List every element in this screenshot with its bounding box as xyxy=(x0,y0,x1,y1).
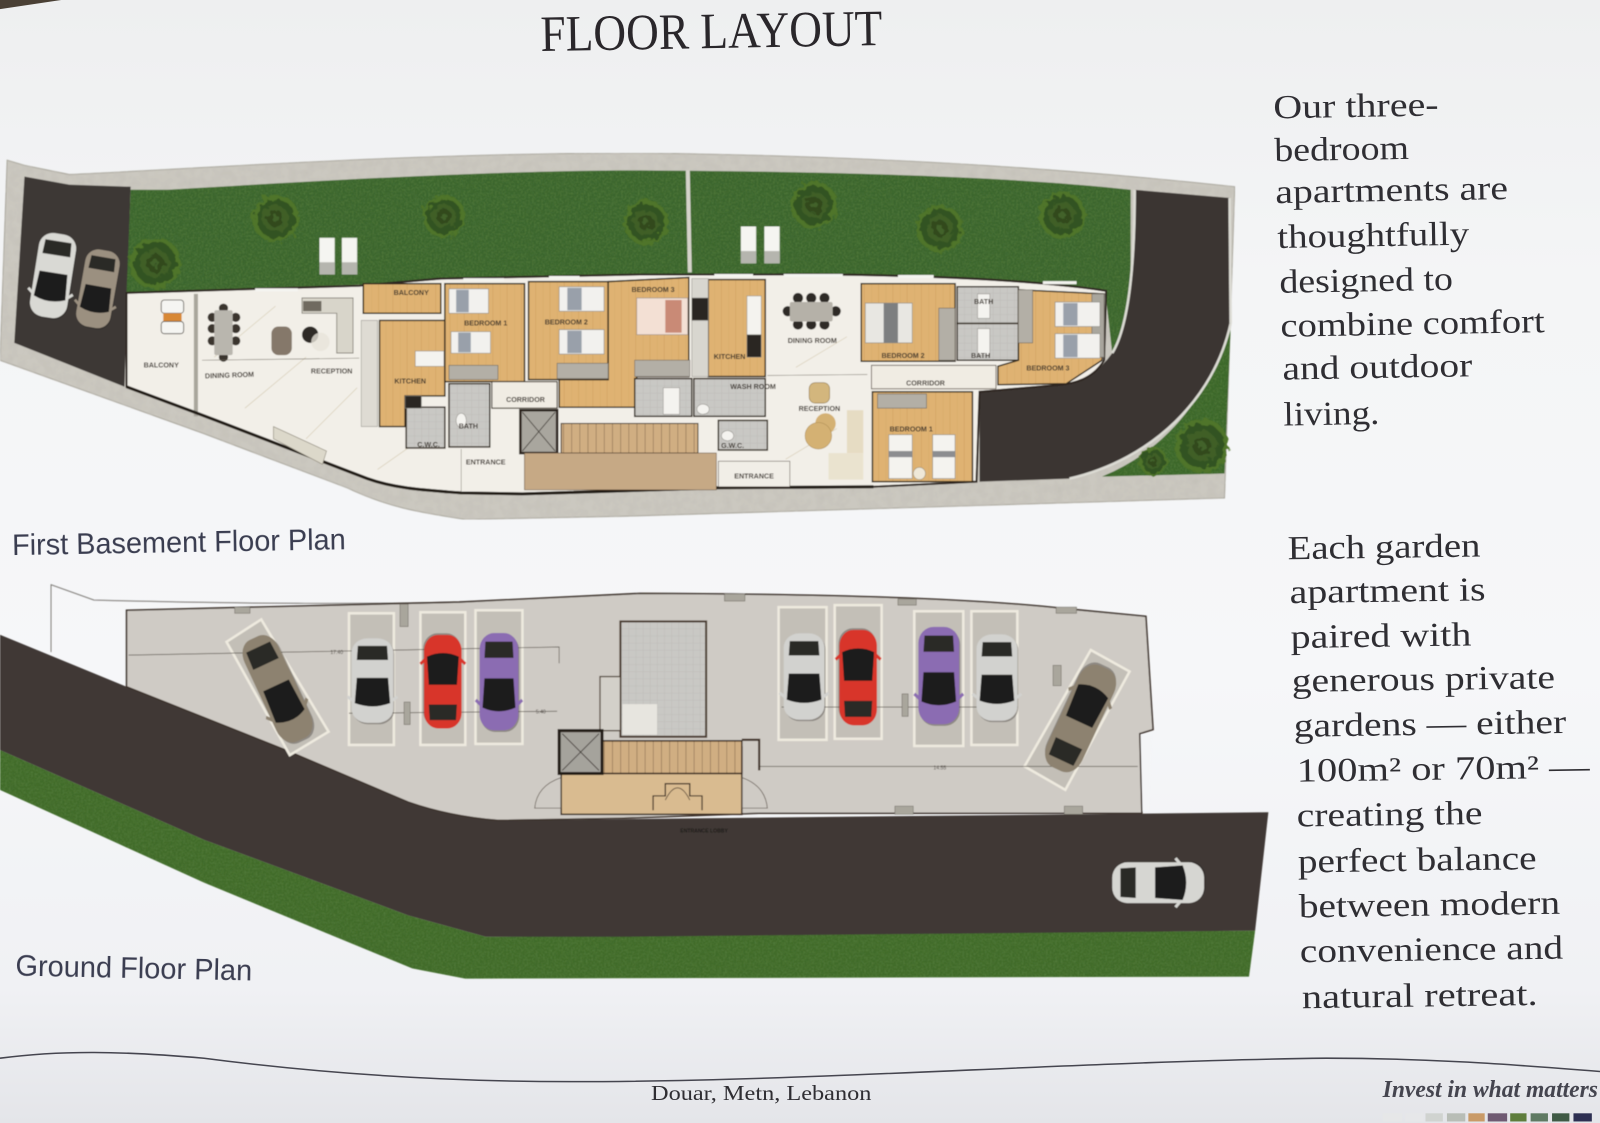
dimension values: 1.80 xyxy=(934,706,944,712)
room labels: BALCONY xyxy=(144,361,179,369)
right dining table xyxy=(783,293,841,330)
dimension values: 14.55 xyxy=(933,765,946,771)
dimension values: 17.40 xyxy=(330,650,343,656)
access road xyxy=(0,635,1268,937)
text block: three-bedroom apartments xyxy=(1273,86,1546,434)
first basement floor plan xyxy=(0,153,1235,519)
notch at garage edge xyxy=(1141,735,1152,811)
text block: three-bedroom apartments: apartments are xyxy=(1275,170,1508,211)
storage room xyxy=(600,621,706,737)
dimension values: 5.40 xyxy=(536,709,546,715)
room labels: BEDROOM 2 xyxy=(545,319,588,327)
room labels: ENTRANCE xyxy=(466,458,506,466)
driveway curbs xyxy=(1069,190,1231,479)
text block: garden apartments: apartment is xyxy=(1289,571,1486,611)
text block: three-bedroom apartments: designed to xyxy=(1279,261,1453,301)
text block: garden apartments: perfect balance xyxy=(1298,840,1537,880)
closets xyxy=(449,290,1104,408)
text block: garden apartments: 100m² or 70m² — xyxy=(1297,749,1590,790)
plot boundary xyxy=(51,585,459,652)
beds xyxy=(449,287,1100,480)
room labels xyxy=(144,286,1070,481)
text block: three-bedroom apartments: combine comfort xyxy=(1280,303,1546,345)
room labels: BATH xyxy=(974,298,993,306)
dimension values: 1.80 xyxy=(493,710,503,716)
garden xyxy=(127,170,1131,353)
room labels: BEDROOM 3 xyxy=(1026,364,1070,372)
room labels: G.W.C. xyxy=(721,442,744,450)
room labels: ENTRANCE xyxy=(734,473,774,481)
dimension values xyxy=(330,650,1002,771)
text block: garden apartments: between modern xyxy=(1299,885,1560,925)
garage floor xyxy=(127,593,1153,820)
dimension values: 1.80 xyxy=(366,715,377,721)
room labels: KITCHEN xyxy=(394,378,426,386)
apartment footprint xyxy=(127,274,1106,494)
circulation and lobby xyxy=(492,365,996,490)
balcony partition xyxy=(194,294,198,416)
parking bays xyxy=(227,605,1130,790)
footer location: Douar, Metn, Lebanon xyxy=(651,1081,872,1105)
room labels: BEDROOM 3 xyxy=(631,286,675,294)
footer wave line xyxy=(0,1052,1600,1082)
room labels: BATH xyxy=(459,423,478,431)
text block: garden apartments: paired with xyxy=(1290,616,1472,656)
room labels: DINING ROOM xyxy=(205,371,254,380)
window seat xyxy=(273,427,327,464)
dimension values: 1.80 xyxy=(992,706,1002,712)
dimension lines xyxy=(202,358,867,492)
car on road xyxy=(1112,858,1206,907)
text block: three-bedroom apartments: living. xyxy=(1283,395,1380,434)
dark corner of photo xyxy=(0,0,61,9)
text block: three-bedroom apartments: thoughtfully xyxy=(1277,216,1470,256)
text block: garden apartments: Each garden xyxy=(1287,528,1481,567)
perimeter wall xyxy=(0,153,1235,519)
colour swatches xyxy=(1383,1113,1592,1121)
text block: garden apartments: natural retreat. xyxy=(1302,976,1538,1016)
garden divider xyxy=(688,170,690,272)
marble veining xyxy=(214,306,847,469)
balcony furniture xyxy=(161,300,184,334)
room labels: BEDROOM 1 xyxy=(464,320,507,328)
label: ground floor plan: Ground Floor Plan xyxy=(15,950,253,988)
room labels: CORRIDOR xyxy=(906,380,945,388)
windows along garden facade xyxy=(255,276,1077,290)
title: FLOOR LAYOUT xyxy=(540,1,883,63)
bathrooms xyxy=(406,287,1018,450)
left dining table xyxy=(208,304,240,362)
room labels: RECEPTION xyxy=(311,367,352,375)
label: first basement floor plan: First Basement Floor Plan xyxy=(12,523,346,562)
room labels: BALCONY xyxy=(394,289,429,297)
fixtures xyxy=(361,279,990,441)
text block: garden apartments: convenience and xyxy=(1300,930,1564,970)
right garden xyxy=(1102,327,1231,477)
text block: garden apartments: generous private xyxy=(1291,659,1555,700)
right driveway xyxy=(980,190,1231,482)
text block: three-bedroom apartments: Our three- xyxy=(1273,86,1439,126)
text block: three-bedroom apartments: bedroom xyxy=(1274,130,1409,169)
lower facade wall xyxy=(127,387,873,494)
columns xyxy=(235,594,1083,814)
left reception furniture xyxy=(271,298,353,355)
footer tagline: Invest in what matters xyxy=(1382,1076,1598,1103)
text block: garden apartments: gardens — either xyxy=(1293,704,1566,745)
room labels: RECEPTION xyxy=(799,405,840,413)
right reception furniture xyxy=(805,383,863,480)
garden trees xyxy=(129,182,1229,475)
room labels: BATH xyxy=(971,352,990,360)
room labels: C.W.C. xyxy=(417,441,440,449)
dimension lines xyxy=(129,647,1138,766)
room labels: DINING ROOM xyxy=(788,337,837,345)
left driveway xyxy=(14,177,131,387)
cars in bays xyxy=(233,627,1126,779)
room labels: BEDROOM 2 xyxy=(881,352,925,360)
ground floor plan xyxy=(0,585,1268,979)
room labels: KITCHEN xyxy=(714,353,745,361)
stair core xyxy=(535,731,767,814)
text block: three-bedroom apartments: and outdoor xyxy=(1282,347,1473,388)
text block: garden apartments xyxy=(1287,528,1590,1016)
room labels: CORRIDOR xyxy=(506,396,545,404)
sun loungers xyxy=(319,227,780,274)
setback label: ENTRANCE LOBBY xyxy=(680,829,728,835)
dimension values: 1.80 xyxy=(797,706,807,712)
text block: garden apartments: creating the xyxy=(1297,795,1483,835)
wood floored rooms xyxy=(363,278,1104,482)
lower grass strip xyxy=(0,750,1255,979)
parked cars left xyxy=(24,230,125,332)
room labels: WASH ROOM xyxy=(730,383,776,391)
room labels: BEDROOM 1 xyxy=(890,426,933,434)
